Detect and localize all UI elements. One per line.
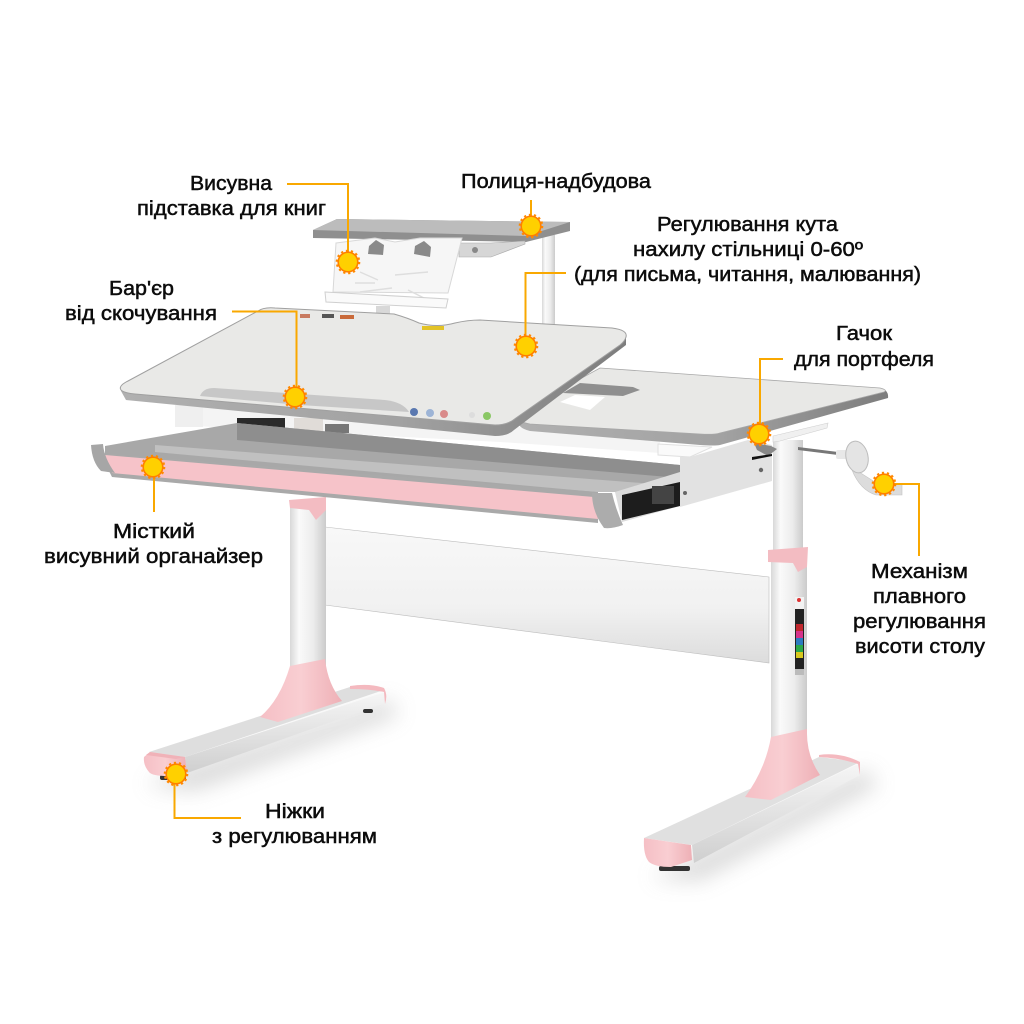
label: height mechanism [853, 560, 986, 658]
leader: shelf [530, 200, 532, 225]
label: organizer: Місткий [113, 520, 195, 543]
label: hook: Гачок [836, 322, 893, 345]
desktop icon row [410, 408, 491, 420]
right foot bar [644, 757, 860, 845]
label: organizer: висувний органайзер [44, 545, 263, 568]
under-desk rail [175, 405, 660, 453]
label: anti-roll barrier [65, 277, 217, 325]
left foot bar [149, 687, 384, 757]
leader: feet [174, 775, 241, 818]
marker: organizer [142, 456, 164, 478]
marker: hook [748, 423, 770, 445]
label: feet: Ніжки [265, 800, 325, 823]
hook [752, 443, 777, 460]
drawer side bracket [680, 440, 772, 507]
label: tilt adjustment: нахилу стільниці 0-60º [633, 238, 864, 261]
leader: hook [760, 359, 783, 434]
right column [771, 550, 807, 740]
label: hook: для портфеля [794, 348, 934, 371]
right drawer cap [592, 493, 623, 528]
leader: anti-roll [232, 312, 296, 397]
marker: tilt [515, 335, 537, 357]
drawer slide [615, 472, 680, 522]
desktop sticker row [300, 314, 354, 319]
right foot back cap [819, 754, 860, 775]
desk illustration [91, 219, 902, 880]
right collar [768, 547, 808, 572]
label: book stand: підставка для книг [137, 197, 326, 220]
label: anti-roll barrier: Бар'єр [109, 277, 174, 300]
label: anti-roll barrier: від скочування [65, 302, 217, 325]
leader: crank [885, 484, 919, 556]
marker: crank [873, 473, 895, 495]
label: feet [212, 800, 377, 848]
leader: tilt [526, 273, 566, 346]
label: height mechanism: плавного [873, 585, 966, 608]
right desktop [517, 368, 888, 446]
marker: feet [165, 763, 187, 785]
label: height mechanism: регулювання [853, 610, 986, 633]
label: height mechanism: Механізм [871, 560, 968, 583]
warning sticker [422, 326, 444, 330]
marker: anti-roll [284, 386, 306, 408]
tilted desktop [120, 308, 626, 436]
label: tilt adjustment: Регулювання кута [657, 213, 839, 236]
leader: organizer [153, 467, 155, 512]
label: organizer [44, 520, 263, 568]
book stand [325, 238, 462, 308]
marker: shelf [520, 215, 542, 237]
right pink base [745, 729, 820, 800]
drawer tray [105, 423, 680, 492]
left leg [144, 497, 386, 780]
top column cap [773, 423, 828, 442]
shelf arm and hinge [459, 241, 525, 257]
white under-top bracket block [658, 444, 712, 457]
label: shelf: Полиця-надбудова [461, 170, 652, 193]
rear shelf post [542, 235, 555, 325]
leader: book stand [287, 184, 348, 262]
anti-roll bar [200, 388, 409, 412]
left column [290, 500, 326, 668]
label: book stand: Висувна [190, 172, 273, 195]
label: hook [794, 322, 934, 371]
label: feet: з регулюванням [212, 825, 377, 848]
right foot front cap [644, 838, 692, 867]
marker: book stand [337, 251, 359, 273]
shelf [313, 219, 570, 242]
label: height mechanism: висоти столу [855, 635, 986, 658]
under-desk mechanism [237, 418, 285, 429]
left foot front cap [144, 752, 187, 776]
height scale label [795, 597, 804, 675]
rear support stem [376, 306, 390, 318]
label: book stand [137, 172, 326, 220]
crank handle [798, 439, 902, 495]
left foot back cap [350, 685, 386, 704]
floor shadows [145, 700, 878, 880]
label: tilt adjustment: (для письма, читання, малювання) [574, 263, 921, 286]
right leg [644, 440, 860, 871]
left pink base [260, 659, 342, 722]
crossbeam [325, 527, 769, 663]
left drawer cap [91, 444, 115, 473]
label: tilt adjustment [574, 213, 921, 286]
left collar [289, 497, 326, 520]
drawer front [91, 444, 623, 528]
